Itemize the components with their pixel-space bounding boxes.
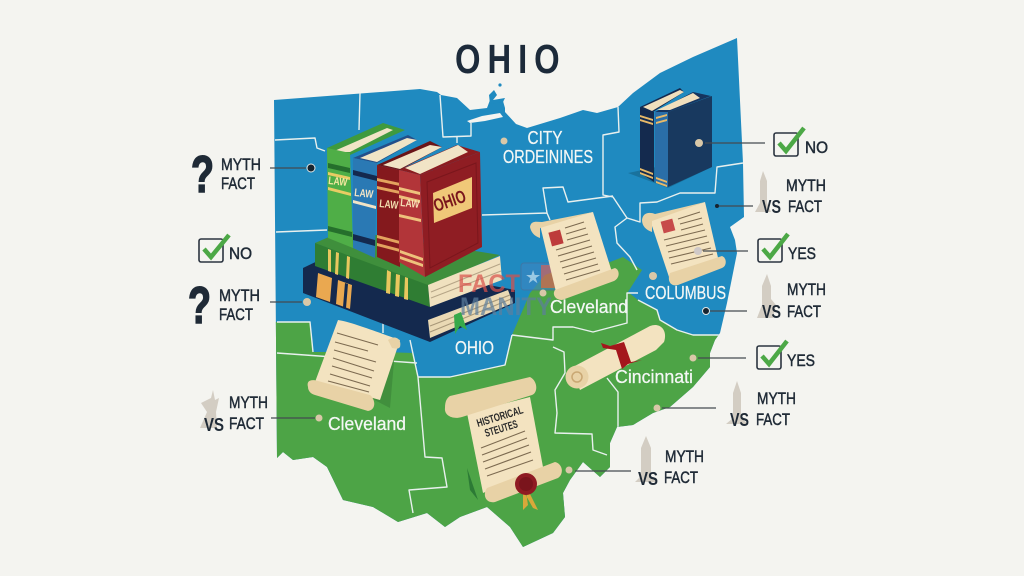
- callout: right myth vs fact 1: FACT: [788, 197, 822, 216]
- callout: right myth vs fact 2: VS: [762, 302, 781, 322]
- map of Ohio: [260, 30, 760, 560]
- callout: right yes check 1: YES: [788, 244, 816, 263]
- lake island: [489, 90, 505, 104]
- callout: right yes check 1: [703, 234, 816, 263]
- scroll: right: [642, 202, 726, 285]
- callout: left myth vs fact: MYTH: [229, 393, 268, 412]
- seal: [515, 473, 538, 510]
- callout: left myth vs fact: VS: [204, 415, 224, 435]
- callout: left myth fact 2: ?: [188, 277, 211, 335]
- upright blue book: [353, 135, 417, 258]
- upright blue book: LAW: [354, 187, 374, 201]
- callout: right myth vs fact 4: MYTH: [665, 447, 704, 466]
- label: OHIO: OHIO: [431, 186, 469, 216]
- lying green book: [315, 230, 502, 307]
- upright dark red book: LAW: [379, 198, 399, 212]
- map labels: Cleveland: [550, 297, 628, 317]
- watermark: FACT: [458, 270, 520, 298]
- callout: right myth vs fact 2: FACT: [787, 302, 821, 321]
- callout: right myth vs fact 4: VS: [638, 469, 658, 489]
- callout: left myth vs fact: FACT: [229, 414, 264, 433]
- callout: right myth vs fact 2: [710, 274, 826, 322]
- title: OHIO: [455, 35, 567, 82]
- callout: left myth vs fact: [200, 390, 315, 435]
- watermark: [458, 263, 560, 321]
- callout: right myth vs fact 1: [719, 171, 826, 217]
- callout: left myth fact 2: MYTH: [219, 286, 260, 305]
- callout: right myth vs fact 3: [662, 381, 796, 430]
- callout: right myth vs fact 2: MYTH: [787, 280, 826, 299]
- scroll: lower left: [308, 320, 400, 411]
- callout: right myth vs fact 1: VS: [762, 197, 781, 217]
- lying navy book: [303, 255, 515, 342]
- scroll: historical statutes: [445, 377, 562, 510]
- callout: right no check: [705, 128, 828, 157]
- callout: right myth vs fact 4: FACT: [664, 468, 698, 487]
- callout: right myth vs fact 3: FACT: [756, 410, 790, 429]
- callout: right myth vs fact 3: VS: [730, 410, 749, 430]
- map labels: [328, 128, 726, 434]
- watermark: MANITY: [460, 293, 552, 321]
- watermark: ★: [525, 267, 541, 287]
- rolled scroll: [566, 325, 665, 390]
- callout: left myth fact 2: [188, 277, 302, 335]
- callout: left myth fact 1: [191, 146, 306, 204]
- callout: right no check: NO: [805, 138, 828, 157]
- callout: right myth vs fact 1: MYTH: [786, 176, 826, 195]
- lake inlet: [467, 113, 503, 123]
- map labels: OHIO: [455, 338, 494, 358]
- callout: left myth fact 1: ?: [191, 146, 214, 204]
- scroll: historical statutes: STEUTES: [483, 418, 519, 440]
- map labels: CITY: [528, 128, 562, 148]
- callout: left myth fact 1: FACT: [221, 174, 255, 193]
- callout: right myth vs fact 4: [575, 436, 704, 489]
- callout: right myth vs fact 3: MYTH: [757, 389, 796, 408]
- callout: left no check: [199, 235, 252, 263]
- upright red book with Ohio label: [399, 145, 482, 277]
- scroll: upper centre: [530, 212, 619, 300]
- book stack: [303, 123, 515, 342]
- map labels: COLUMBUS: [645, 283, 726, 303]
- bookmark: [454, 312, 467, 334]
- upright green book: LAW: [328, 175, 348, 189]
- map marker dots: [303, 138, 719, 474]
- upright green book: [327, 123, 405, 248]
- upright dark red book: [377, 141, 442, 267]
- map labels: Cincinnati: [615, 367, 693, 387]
- callout: left no check: NO: [229, 244, 252, 263]
- map labels: Cleveland: [328, 414, 406, 434]
- callout: left myth fact 1: MYTH: [221, 155, 261, 174]
- callout: left myth fact 2: FACT: [219, 305, 253, 324]
- callout: right yes check 2: [698, 341, 815, 370]
- upright red book with Ohio label: LAW: [400, 197, 420, 211]
- map labels: ORDEININES: [503, 147, 593, 167]
- scroll: historical statutes: HISTORICAL: [475, 404, 525, 430]
- right navy books: [628, 88, 712, 188]
- callout: right yes check 2: YES: [787, 351, 815, 370]
